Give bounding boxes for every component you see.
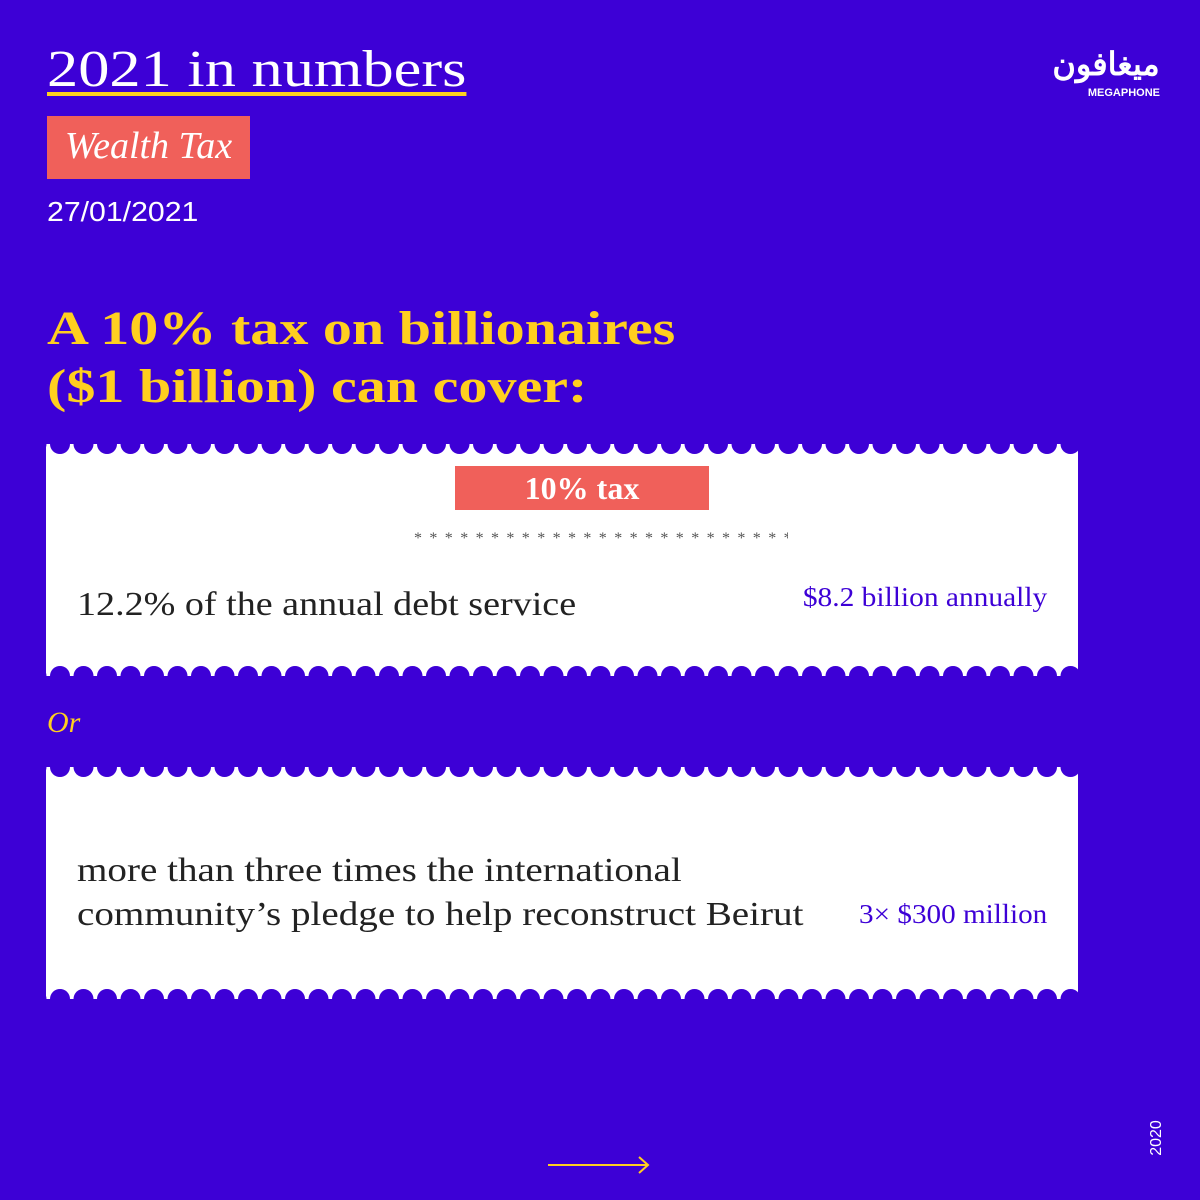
tag: Wealth Tax (47, 116, 250, 179)
logo (1052, 46, 1160, 99)
headline: A 10% tax on billionaires (47, 302, 675, 355)
logo: MEGAPHONE (1088, 87, 1160, 99)
logo: ميغافون (1052, 46, 1160, 82)
dotted line: ************************* (414, 530, 788, 547)
value: pledge: 3× $300 million (859, 899, 1047, 929)
connector: Or: Or (47, 706, 80, 739)
panel: debt service (46, 444, 1078, 676)
headline (47, 302, 675, 413)
title: 2021 in numbers (47, 41, 466, 98)
label: 10% tax: 10% tax (525, 470, 639, 506)
text: pledge: more than three times the international (77, 852, 682, 889)
label: 10% tax (455, 466, 709, 510)
text: pledge (77, 852, 804, 933)
text: debt: 12.2% of the annual debt service (77, 586, 576, 623)
arrow (548, 1156, 650, 1174)
headline: ($1 billion) can cover: (47, 360, 587, 413)
panel: reconstruction (46, 767, 1078, 999)
text: pledge: community’s pledge to help reconstruct Beirut (77, 896, 803, 933)
value: debt: $8.2 billion annually (803, 582, 1047, 612)
year vertical: 2020 (1148, 1120, 1165, 1156)
date: 27/01/2021 (47, 196, 198, 227)
tag: Wealth Tax: Wealth Tax (65, 125, 232, 167)
